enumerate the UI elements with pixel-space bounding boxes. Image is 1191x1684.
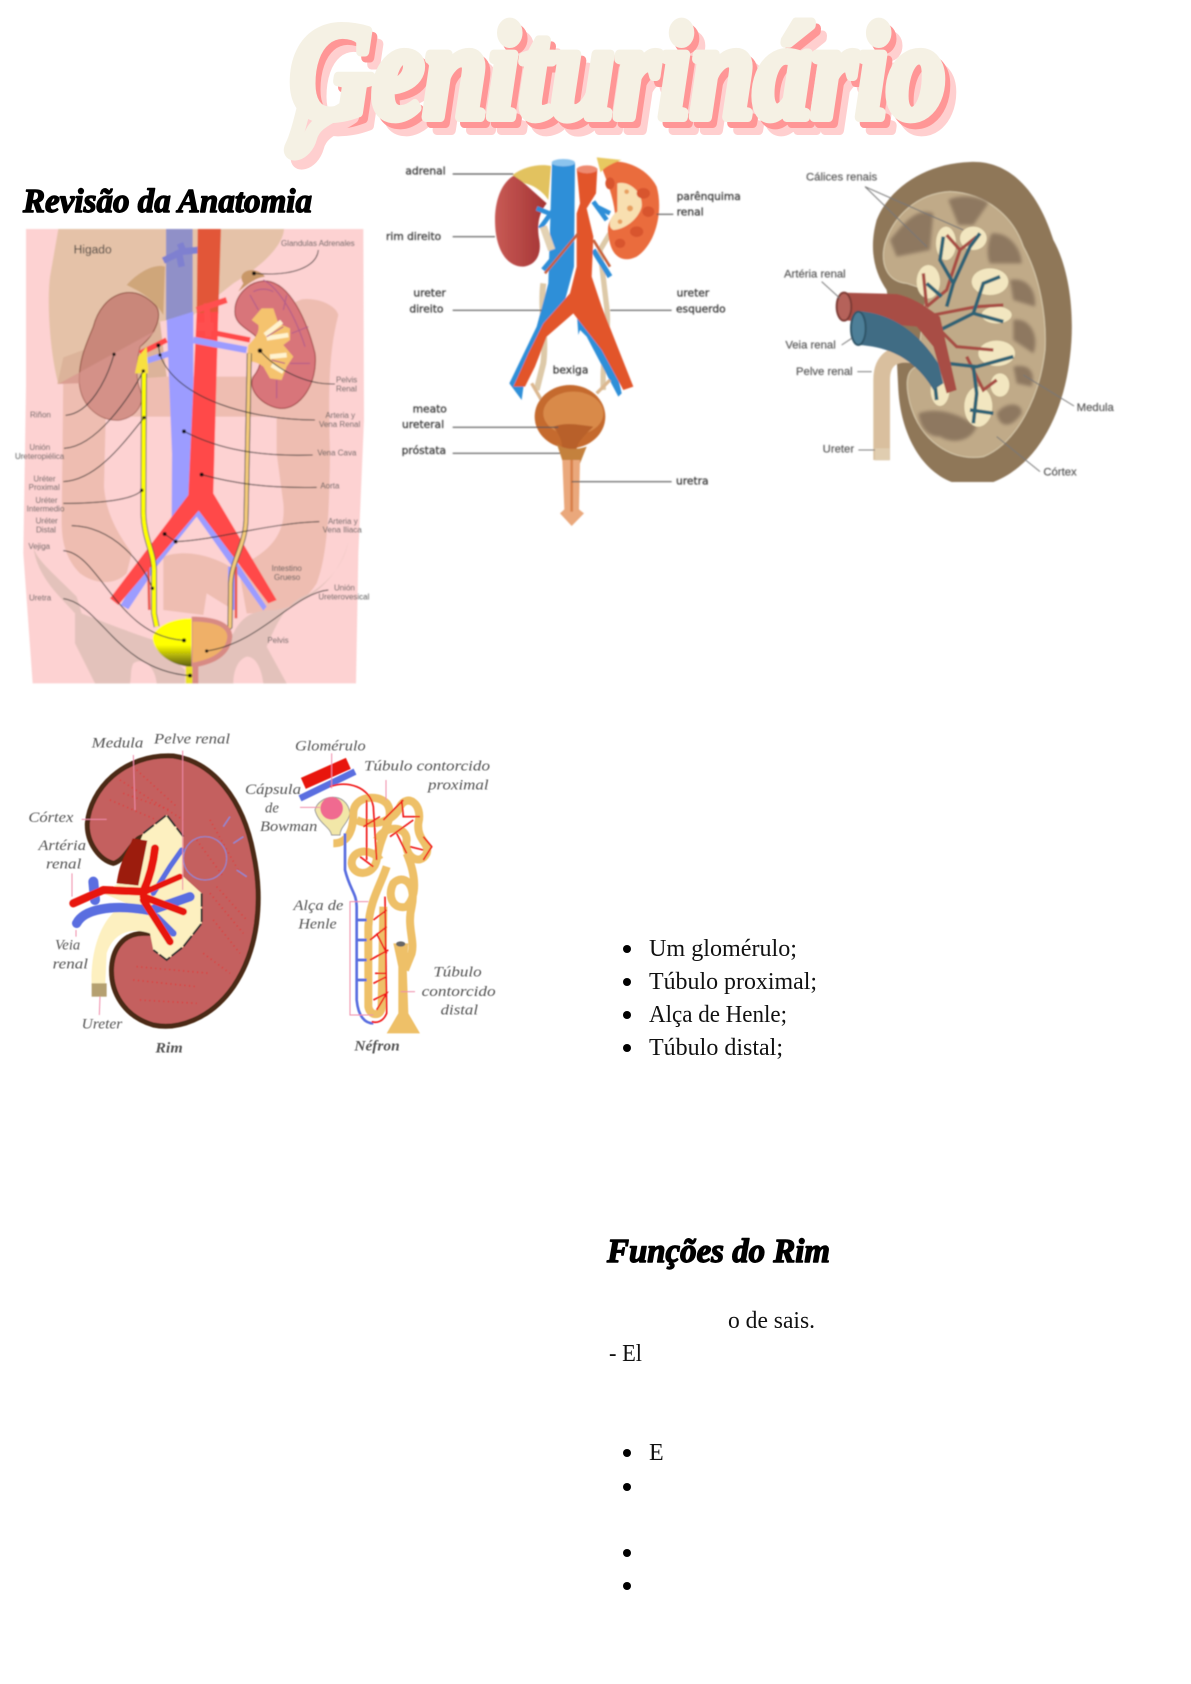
labels: Bowman: [260, 819, 317, 835]
right kidney: [495, 175, 547, 267]
anatomy labels: Uréter: [36, 516, 58, 525]
left kidney: [79, 293, 159, 420]
labels: Cálices renais: [806, 172, 877, 184]
anatomy labels: Vejiga: [28, 542, 51, 551]
labels: ureter: [677, 287, 710, 300]
labels: renal: [53, 956, 88, 972]
anatomy labels: Grueso: [274, 573, 301, 582]
labels: [784, 172, 1115, 479]
ureter tip: [92, 983, 107, 997]
labels: Túbulo contorcido: [364, 759, 490, 775]
text block: kidney functions: - El: [609, 1341, 642, 1367]
labels: renal: [677, 205, 704, 218]
panel: kidneys, ureters and bladder: [386, 157, 741, 526]
renal artery branches: [923, 235, 1003, 390]
labels: de: [265, 800, 279, 816]
title: Geniturinário: [295, 3, 950, 153]
title: Geniturinário: [301, 10, 956, 160]
labels: Túbulo: [433, 965, 482, 981]
heading: Revisão da Anatomia: Revisão da Anatomia: [22, 183, 312, 220]
cortex: [883, 192, 1045, 457]
left adrenal: [597, 157, 622, 173]
pelvis bones: [33, 547, 185, 683]
list: nephron parts: Alça de Henle;: [649, 1002, 787, 1028]
anatomy labels: Riñon: [30, 410, 51, 419]
anatomy labels: Uretra: [29, 593, 52, 602]
labels: [28, 731, 496, 1057]
labels: Ureter: [82, 1017, 123, 1033]
labels: bexiga: [553, 363, 588, 376]
labels: Cápsula: [245, 782, 301, 798]
anatomy labels: Distal: [36, 525, 56, 534]
labels: Artéria renal: [784, 269, 846, 281]
list: kidney functions: [623, 1440, 664, 1590]
anatomy labels: Proximal: [29, 483, 60, 492]
prostate and urethra: [557, 443, 587, 463]
liver: [49, 229, 284, 384]
kidney: [87, 756, 258, 1026]
labels: Medula: [91, 735, 143, 751]
text block: kidney functions: [609, 1308, 815, 1367]
labels: Glomérulo: [295, 739, 366, 755]
labels: contorcido: [422, 984, 496, 1000]
body background: [23, 229, 364, 683]
labels: Medula: [1077, 402, 1115, 414]
medulla dark: [117, 838, 147, 886]
panel: kidney and nephron: [28, 731, 496, 1057]
labels: Néfron: [353, 1039, 400, 1055]
anatomy labels: Pelvis: [336, 376, 357, 385]
renal sinus: [92, 815, 202, 990]
calyces: [917, 227, 1015, 427]
labels: próstata: [402, 444, 446, 457]
labels: proximal: [427, 777, 489, 793]
anatomy labels: Intermedio: [27, 505, 65, 514]
labels: Ureter: [823, 444, 854, 456]
labels: adrenal: [405, 165, 446, 178]
labels: meato: [413, 403, 447, 416]
renal pelvis: [247, 308, 293, 380]
bladder: [153, 618, 192, 667]
labels: uretra: [676, 475, 709, 488]
leader lines: [63, 250, 335, 676]
aorta and iliac arteries: [513, 168, 633, 390]
anatomy labels: Aorta: [320, 481, 340, 490]
pink leaders: [72, 751, 415, 1015]
anatomy labels: Vena Iliaca: [323, 526, 362, 535]
tubules: [333, 798, 427, 1014]
ureter: [882, 354, 913, 460]
nephron vessels: [303, 763, 348, 783]
anatomy labels: Ureteropiélica: [15, 452, 65, 461]
panel: kidney cross section: [784, 162, 1115, 487]
right kidney: [235, 281, 315, 408]
anatomy labels: Pelvis: [267, 636, 289, 645]
labels: Córtex: [28, 810, 74, 826]
labels: parênquima: [677, 190, 741, 203]
anatomy labels: Renal: [336, 385, 357, 394]
anatomy labels: Ureterovesical: [318, 593, 370, 602]
vasa recta: [345, 833, 373, 1023]
labels: Rim: [154, 1041, 183, 1057]
renal vessels: [140, 340, 167, 353]
anatomy labels: Unión: [334, 584, 355, 593]
list: nephron parts: Um glomérulo;: [649, 936, 797, 962]
list: nephron parts: Túbulo proximal;: [649, 969, 817, 995]
labels: Veia renal: [785, 340, 836, 352]
heading: Funções do Rim: Funções do Rim: [606, 1233, 830, 1270]
labels: Artéria: [37, 838, 86, 854]
leader lines: [822, 187, 1074, 472]
ureters behind: [537, 227, 552, 390]
aorta: [197, 229, 221, 313]
anatomy labels: Unión: [29, 443, 50, 452]
labels: Henle: [297, 917, 337, 933]
bowman capsule: [315, 797, 350, 835]
right adrenal: [513, 165, 551, 200]
anatomy labels: [15, 239, 370, 645]
anatomy labels: Uréter: [35, 496, 58, 505]
labels: direito: [409, 302, 443, 315]
vena cava and iliac veins: [509, 163, 575, 400]
large intestine: [62, 299, 338, 615]
renal artery: [842, 293, 957, 393]
renal vein: [858, 311, 943, 390]
medulla pyramids: [890, 196, 1035, 441]
list: kidney functions: E: [649, 1440, 664, 1466]
labels: Pelve renal: [153, 731, 230, 747]
labels: ureter: [413, 287, 447, 300]
anatomy labels: Higado: [74, 242, 112, 256]
labels: rim direito: [386, 230, 441, 243]
renal vein branches: [927, 233, 1013, 423]
labels: Alça de: [292, 898, 344, 914]
renal vein: [77, 850, 190, 933]
labels: Pelve renal: [796, 366, 853, 378]
labels: distal: [441, 1003, 478, 1019]
bladder: [535, 385, 605, 448]
anatomy labels: Uréter: [33, 474, 56, 483]
labels: Córtex: [1043, 467, 1077, 479]
capsule: [873, 162, 1072, 487]
list: nephron parts: [623, 936, 817, 1061]
ureters: [143, 372, 157, 627]
vena cava: [166, 229, 193, 320]
labels: Veia: [55, 937, 80, 953]
anatomy labels: Glandulas Adrenales: [281, 239, 355, 248]
left kidney: [600, 161, 659, 259]
anatomy labels: Vena Renal: [319, 420, 361, 429]
anatomy labels: Arteria y: [328, 517, 358, 526]
renal vessels: [537, 202, 610, 228]
labels: ureteral: [402, 418, 444, 431]
kidney lobes: [250, 280, 310, 398]
anatomy labels: Arteria y: [325, 411, 355, 420]
anatomy labels: Vena Cava: [317, 449, 357, 458]
renal artery: [73, 848, 183, 942]
lobule circle: [183, 837, 227, 880]
anchor dots: [112, 271, 262, 678]
list: nephron parts: Túbulo distal;: [649, 1035, 783, 1061]
title: Geniturinário: [290, 0, 945, 147]
anatomy labels: Intestino: [272, 564, 302, 573]
speckles: [110, 770, 247, 1003]
text block: kidney functions: o de sais.: [728, 1308, 815, 1334]
leader lines: [453, 174, 673, 482]
labels: renal: [46, 856, 81, 872]
panel: urinary system front view: [15, 229, 370, 683]
collecting duct: [387, 943, 420, 1033]
labels: [386, 165, 741, 488]
labels: esquerdo: [676, 302, 726, 315]
